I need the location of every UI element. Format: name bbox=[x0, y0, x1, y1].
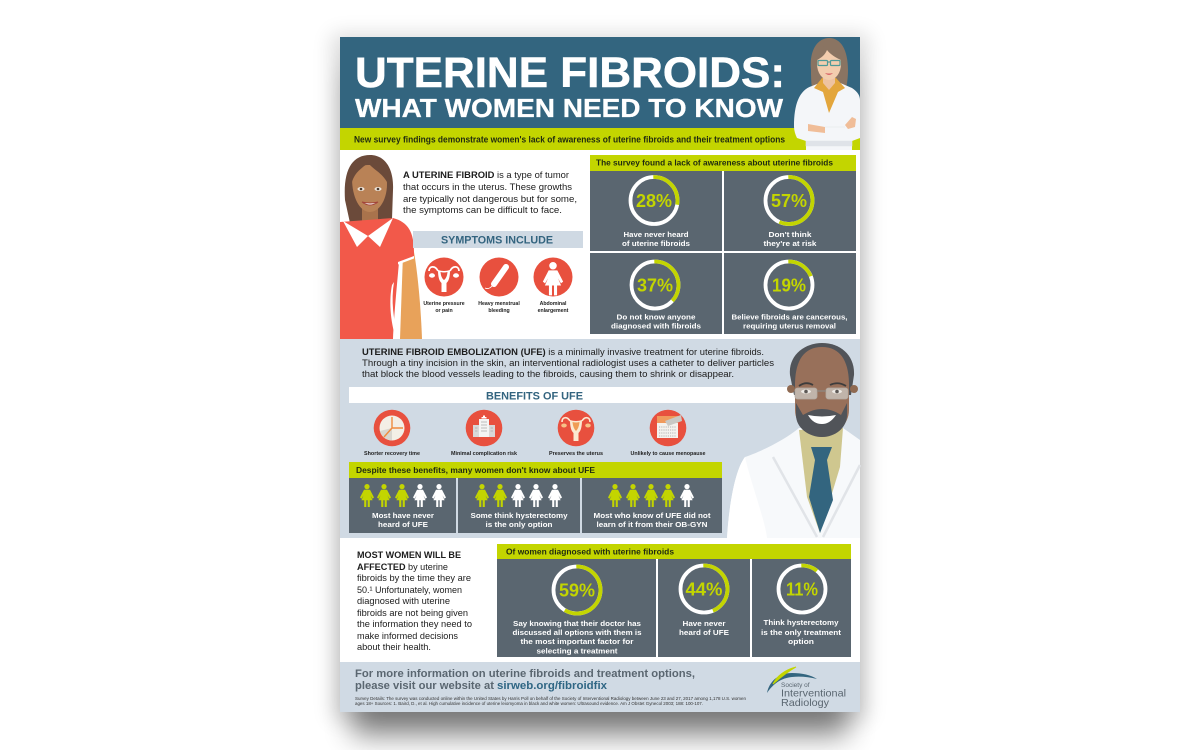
stat: 44% bbox=[658, 559, 750, 657]
people icons: 2 of 5 bbox=[475, 484, 562, 507]
stat: 19%: Believe fibroids are cancerous, bbox=[732, 312, 848, 322]
stat group: not from OB-GYN: Most who know of UFE did not bbox=[594, 511, 711, 520]
panel: women diagnosed bbox=[497, 544, 851, 657]
benefit labels: Shorter recovery time bbox=[364, 451, 420, 457]
people icons: 3 of 5 bbox=[360, 484, 446, 507]
text block: UFE definition: Through a tiny incision in the skin, an interventional radiologist uses a catheter to deliver particles bbox=[362, 358, 774, 368]
stat: 59% bbox=[497, 559, 656, 657]
stat group: not from OB-GYN: learn of it from their OB-GYN bbox=[596, 520, 708, 529]
stat: 11%: 11% bbox=[786, 578, 818, 600]
text block: UFE definition bbox=[362, 347, 774, 379]
symptom labels: Heavy menstrual bbox=[478, 301, 520, 307]
symptom labels: enlargement bbox=[538, 308, 569, 314]
icon: clock bbox=[374, 410, 410, 446]
text block: UFE definition: that block the blood vessels leading to the fibroids, causing them to shrink or disappear. bbox=[362, 369, 734, 379]
symptom labels: bleeding bbox=[488, 308, 510, 314]
stat: 28%: 28% bbox=[636, 190, 672, 211]
text block: most women affected: make informed decisions bbox=[357, 631, 458, 641]
stat: 37%: Do not know anyone bbox=[616, 312, 696, 322]
poster base bbox=[340, 37, 860, 712]
illustration: female doctor bbox=[794, 38, 860, 150]
benefit labels bbox=[364, 451, 706, 457]
stat: 28% bbox=[590, 171, 722, 251]
stat: 44%: 44% bbox=[686, 578, 722, 600]
stat: 59%: discussed all options with them is bbox=[512, 628, 642, 637]
stat group: hysterectomy only option bbox=[458, 478, 580, 533]
logo: Society of Interventional Radiology: Radiology bbox=[781, 697, 830, 709]
panel: benefits icons bbox=[364, 410, 706, 457]
stat group: never heard of UFE: heard of UFE bbox=[378, 520, 428, 529]
header banner bbox=[340, 37, 860, 128]
text block: most women affected: AFFECTED by uterine bbox=[357, 562, 448, 572]
stat: 44%: heard of UFE bbox=[679, 628, 729, 637]
benefit labels: Minimal complication risk bbox=[451, 451, 517, 457]
stat: 19%: requiring uterus removal bbox=[743, 322, 836, 330]
stat: 28%: Have never heard bbox=[624, 230, 689, 239]
title: WHAT WOMEN NEED TO KNOW bbox=[355, 93, 783, 123]
stat group: never heard of UFE bbox=[349, 478, 456, 533]
fine print: ages 18+ Sources: 1. Baird, D., et al. High cumulative incidence of uterine leiomyoma in black and white women: Ultrasound evidence. Am J Obstet Gynecol 2003; 188: 100-107. bbox=[355, 701, 703, 706]
stat: 37%: 37% bbox=[637, 274, 673, 296]
heading: symptoms include: SYMPTOMS INCLUDE bbox=[441, 234, 553, 246]
stat group: never heard of UFE: Most have never bbox=[372, 511, 434, 520]
stat: 11%: is the only treatment bbox=[761, 628, 842, 637]
call to action bbox=[355, 668, 695, 692]
stat: 57%: Don't think bbox=[768, 230, 812, 239]
stat: 59%: the most important factor for bbox=[520, 637, 634, 646]
icon: uterus symptom bbox=[424, 258, 464, 296]
diagnosed heading: Of women diagnosed with uterine fibroids bbox=[506, 546, 674, 556]
heading: benefits of UFE: BENEFITS OF UFE bbox=[486, 390, 583, 402]
text block: uterine fibroid definition bbox=[403, 170, 577, 215]
stat: 57% bbox=[724, 171, 856, 251]
stat: 59%: selecting a treatment bbox=[536, 646, 618, 656]
panel: survey awareness bbox=[590, 155, 856, 334]
stat: 28%: of uterine fibroids bbox=[622, 239, 690, 248]
UFE awareness heading: Despite these benefits, many women don't know about UFE bbox=[356, 465, 595, 475]
people icons: 3.5 of 5 bbox=[608, 484, 694, 507]
stat: 19% bbox=[724, 253, 856, 334]
panel: UFE section background bbox=[340, 339, 860, 538]
logo: Society of Interventional Radiology: Interventional bbox=[781, 688, 846, 700]
stat: 19%: 19% bbox=[772, 274, 806, 296]
symptom labels: Uterine pressure bbox=[423, 301, 465, 307]
subtitle band: New survey findings demonstrate women's lack of awareness of uterine fibroids and their treatment options bbox=[354, 134, 785, 144]
illustration: woman in red dress bbox=[340, 155, 422, 339]
logo: Society of Interventional Radiology bbox=[767, 667, 846, 709]
stat group: hysterectomy only option: Some think hysterectomy bbox=[470, 511, 568, 520]
stat: 11%: option bbox=[788, 637, 814, 646]
panel: UFE awareness bbox=[349, 462, 722, 533]
subtitle band bbox=[340, 128, 860, 150]
text block: uterine fibroid definition: that occurs in the uterus. These growths bbox=[403, 182, 572, 192]
stat: 57%: they're at risk bbox=[764, 239, 817, 248]
icon: preserved uterus bbox=[558, 410, 594, 446]
text block: uterine fibroid definition: are typically not dangerous but for some, bbox=[403, 194, 577, 204]
fine print bbox=[355, 696, 747, 706]
stat group: hysterectomy only option: is the only option bbox=[486, 520, 553, 529]
call to action: For more information on uterine fibroids and treatment options, bbox=[355, 668, 695, 680]
stat: 59%: Say knowing that their doctor has bbox=[513, 619, 641, 628]
stat: 44%: Have never bbox=[682, 619, 726, 628]
text block: UFE definition: UTERINE FIBROID EMBOLIZATION (UFE) is a minimally invasive treatment for uterine fibroids. bbox=[362, 347, 764, 357]
text block: uterine fibroid definition: the symptoms can be difficult to face. bbox=[403, 205, 562, 215]
icon: hospital bbox=[466, 410, 502, 446]
symptom labels bbox=[423, 301, 569, 314]
symptom labels: or pain bbox=[435, 308, 453, 314]
stat: 57%: 57% bbox=[771, 190, 807, 211]
text block: most women affected: the information they need to bbox=[357, 619, 472, 629]
call to action: please visit our website at bbox=[355, 680, 494, 692]
benefit labels: Preserves the uterus bbox=[549, 451, 603, 457]
stat: 37% bbox=[590, 253, 722, 334]
glasses bbox=[795, 388, 848, 399]
icon: abdominal enlargement bbox=[534, 258, 572, 296]
illustration: male doctor bbox=[727, 343, 860, 538]
heading: benefits of UFE bbox=[349, 387, 809, 403]
text block: most women affected: about their health. bbox=[357, 642, 431, 652]
text block: most women affected: 50.¹ Unfortunately, women bbox=[357, 585, 462, 595]
title bbox=[355, 50, 785, 123]
text block: uterine fibroid definition: A UTERINE FIBROID is a type of tumor bbox=[403, 170, 569, 180]
text block: most women affected: fibroids by the time they are bbox=[357, 573, 471, 583]
UFE awareness heading bbox=[349, 462, 722, 478]
stat: 11% bbox=[752, 559, 851, 657]
stat: 37%: diagnosed with fibroids bbox=[611, 322, 701, 330]
survey heading: The survey found a lack of awareness about uterine fibroids bbox=[596, 158, 833, 168]
heading: symptoms include bbox=[413, 231, 583, 248]
symptom labels: Abdominal bbox=[540, 301, 567, 307]
stat: 59%: 59% bbox=[559, 580, 595, 600]
icon: calendar bbox=[650, 410, 686, 446]
footer bbox=[340, 662, 860, 712]
panel: symptoms icons bbox=[423, 258, 572, 314]
fine print: Survey Details: The survey was conducted online within the United States by Harris Poll on behalf of the Society of Interventional Radiology between June 23 and 27, 2017 among 1,178 U.S. women bbox=[355, 696, 747, 701]
text block: most women affected: diagnosed with uterine bbox=[357, 596, 450, 606]
text block: most women affected: fibroids are not being given bbox=[357, 608, 468, 618]
stat: 11%: Think hysterectomy bbox=[764, 618, 839, 627]
text block: most women affected: MOST WOMEN WILL BE bbox=[357, 550, 461, 560]
benefit labels: Unlikely to cause menopause bbox=[630, 451, 706, 457]
call to action: sirweb.org/fibroidfix bbox=[497, 680, 608, 692]
title: UTERINE FIBROIDS: bbox=[355, 50, 785, 97]
text block: most women affected bbox=[357, 550, 472, 652]
logo: Society of Interventional Radiology: Society of bbox=[781, 682, 810, 689]
stat group: not from OB-GYN bbox=[582, 478, 722, 533]
survey heading bbox=[590, 155, 856, 171]
diagnosed heading bbox=[497, 544, 851, 559]
glasses bbox=[818, 60, 840, 66]
poster drop shadow bbox=[332, 34, 868, 736]
icon: heavy bleeding tampon bbox=[480, 258, 518, 296]
